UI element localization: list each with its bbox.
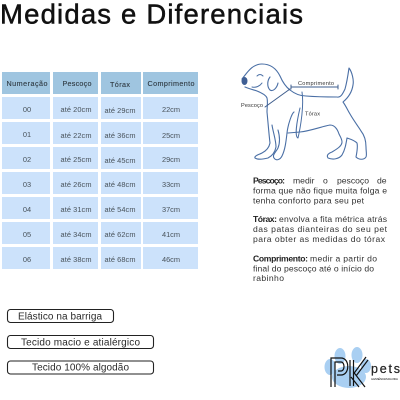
- row 01: 25cm: [162, 131, 180, 140]
- label: Tórax: Tórax: [305, 112, 320, 118]
- row 05: 41cm: [162, 230, 180, 239]
- row 02: [2, 147, 198, 169]
- row 00: até 29cm: [104, 106, 136, 115]
- row 04: 37cm: [162, 205, 180, 214]
- row 02: 02: [23, 155, 31, 164]
- row 00: 22cm: [162, 105, 180, 114]
- dog measuring diagram: [241, 64, 366, 160]
- text block: Comprimento: rabinho: [253, 273, 284, 283]
- table header: Tórax: [110, 80, 130, 89]
- row 02: até 45cm: [104, 156, 136, 165]
- row 06: [2, 247, 198, 269]
- row 06: até 38cm: [60, 255, 92, 264]
- row 03: até 26cm: [60, 180, 92, 189]
- text block: Comprimento: final do pescoço até o início do: [253, 264, 374, 274]
- feature tag: tecido macio: Tecido macio e atialérgico: [21, 338, 140, 348]
- row 05: 05: [23, 230, 31, 239]
- row 05: [2, 222, 198, 244]
- row 00: até 20cm: [60, 105, 92, 114]
- table header: [2, 72, 198, 94]
- table header: Numeração: [6, 79, 48, 88]
- row 02: 29cm: [162, 155, 180, 164]
- row 06: 46cm: [162, 255, 180, 264]
- text block: Pescoço: pescoço: [337, 176, 369, 186]
- feature tag: elástico: [8, 310, 114, 322]
- row 06: até 68cm: [104, 255, 136, 264]
- text block: Comprimento: Comprimento:: [253, 254, 308, 264]
- icon: dog nose: [242, 77, 248, 85]
- row 04: 04: [23, 205, 31, 214]
- row 03: 33cm: [162, 180, 180, 189]
- text block: Pescoço: o: [323, 176, 328, 186]
- text block: Pescoço: Pescoço:: [253, 176, 285, 186]
- icon: blue paw: [324, 347, 371, 388]
- label: Pescoço: Pescoço: [241, 103, 263, 109]
- table header: Pescoço: [62, 79, 92, 88]
- text block: Tórax: das patas dianteiras do seu pet: [253, 224, 388, 234]
- text block: Tórax: Tórax:: [253, 214, 277, 224]
- table header: Comprimento: [148, 79, 194, 88]
- row 05: até 62cm: [104, 230, 136, 239]
- row 03: [2, 172, 198, 194]
- text block: Comprimento: medir a partir do: [310, 254, 377, 264]
- row 03: 03: [23, 180, 31, 189]
- label: Comprimento: Comprimento: [298, 81, 334, 87]
- row 04: até 54cm: [104, 205, 136, 214]
- text block: Pescoço: medir: [293, 176, 315, 186]
- text block: Pescoço: forma que não fique muita folga e: [253, 186, 387, 196]
- logo: PK pets: [324, 347, 400, 388]
- feature tag: algodão: [8, 361, 154, 374]
- row 00: [2, 97, 198, 119]
- text block: Pescoço: de: [377, 176, 387, 186]
- text block: Tórax: para obter as medidas do tórax: [253, 234, 386, 244]
- row 01: até 22cm: [60, 131, 92, 140]
- icon: dog outline: [242, 64, 366, 160]
- feature tag: algodão: Tecido 100% algodão: [32, 362, 129, 374]
- text block: Tórax: envolva a fita métrica atrás: [279, 214, 387, 224]
- row 01: até 36cm: [104, 131, 136, 140]
- row 06: 06: [23, 255, 31, 264]
- row 05: até 34cm: [60, 230, 92, 239]
- pets wordmark: pets: [371, 362, 400, 376]
- logo tagline: & ESSÊNCIAS DA VIDA: [371, 376, 398, 381]
- size table: [2, 72, 198, 269]
- PK monogram: [331, 357, 368, 387]
- row 02: até 25cm: [60, 155, 92, 164]
- row 03: até 48cm: [104, 180, 136, 189]
- row 04: até 31cm: [60, 205, 92, 214]
- row 01: 01: [23, 130, 31, 139]
- text block: Pescoço: tenha conforto para seu pet: [253, 196, 365, 206]
- feature tag: tecido macio: [8, 336, 154, 348]
- row 00: 00: [23, 105, 31, 114]
- row 01: [2, 122, 198, 144]
- feature tag: elástico: Elástico na barriga: [18, 312, 102, 322]
- row 04: [2, 197, 198, 219]
